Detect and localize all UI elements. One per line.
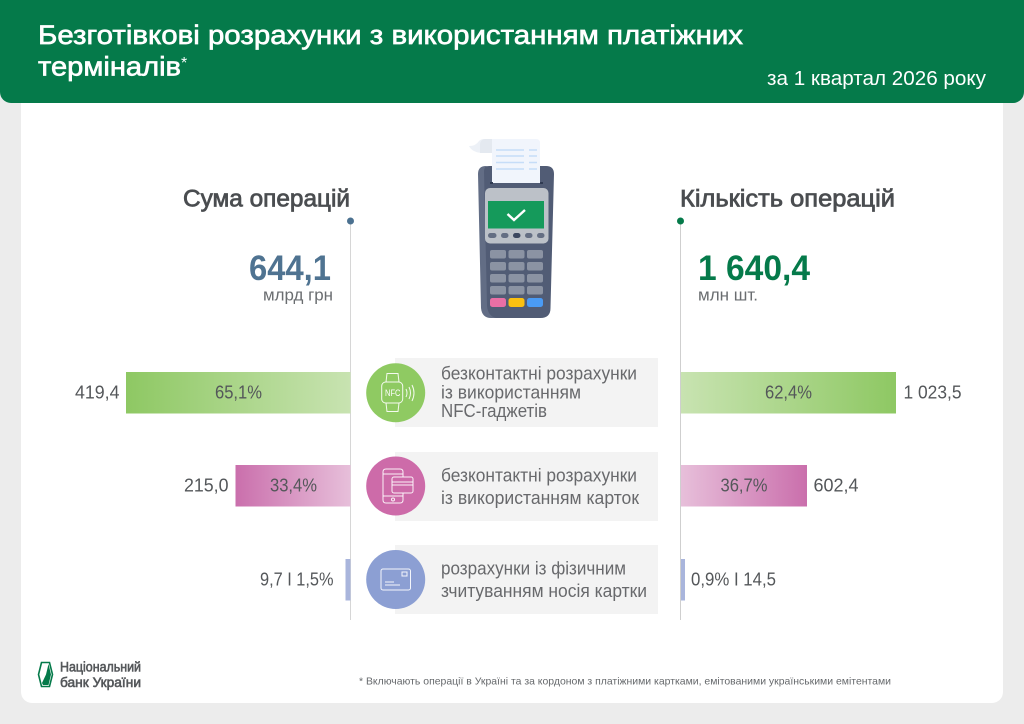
right bar: 1 023,5 <box>904 382 962 402</box>
left bar: 65,1% <box>215 382 262 402</box>
left bar: 9,7 І 1,5% <box>260 570 334 590</box>
left column heading and axis <box>183 186 354 620</box>
description panel: із використанням <box>441 382 581 402</box>
right bar: 602,4 <box>814 476 858 496</box>
right bar: 0,9% І 14,5 <box>691 570 776 590</box>
left column heading and axis: Сума операцій <box>183 186 350 212</box>
logo: National Bank of Ukraine: банк України <box>60 674 141 690</box>
icon: phone and card <box>366 456 425 516</box>
description panel: безконтактні розрахунки <box>441 364 637 384</box>
total amount: млрд грн <box>263 286 333 304</box>
right bar <box>681 372 962 414</box>
title: терміналів <box>38 52 181 82</box>
left bar <box>260 559 350 600</box>
description panel: розрахунки із фізичним <box>441 558 626 578</box>
total count <box>698 249 811 304</box>
description panel <box>395 452 658 521</box>
icon: payment terminal <box>469 139 554 318</box>
right column heading and axis: Кількість операцій <box>680 186 895 212</box>
row 2: cards <box>184 452 858 521</box>
description panel: із використанням карток <box>441 488 639 508</box>
row 3: physical card <box>260 545 776 614</box>
total count: млн шт. <box>698 286 758 304</box>
footnote: * Включають операції в Україні та за кордоном з платіжними картками, емітованими українськими емітентами <box>359 676 891 688</box>
icon: bank card <box>366 550 425 609</box>
left bar: 419,4 <box>75 382 120 402</box>
description panel <box>395 545 658 614</box>
total amount: 644,1 <box>249 249 331 288</box>
total amount <box>249 249 333 304</box>
right bar: 62,4% <box>765 382 812 402</box>
left bar <box>75 372 350 414</box>
left bar: 33,4% <box>270 476 317 496</box>
total count: 1 640,4 <box>698 249 811 288</box>
icon: NFC watch <box>366 363 425 422</box>
row 1: NFC <box>75 358 962 427</box>
right bar <box>681 559 776 600</box>
left bar: 215,0 <box>184 476 228 496</box>
header band <box>0 0 1024 103</box>
description panel: NFC-гаджетів <box>441 401 547 421</box>
logo: National Bank of Ukraine: Національний <box>60 658 141 674</box>
description panel: безконтактні розрахунки <box>441 466 637 486</box>
period label: за 1 квартал 2026 року <box>767 67 987 90</box>
right column heading and axis <box>677 186 895 620</box>
title: Безготівкові розрахунки з використанням платіжних <box>38 20 743 50</box>
right bar <box>681 465 858 506</box>
right bar: 36,7% <box>720 476 768 496</box>
title footnote mark: * <box>181 55 187 72</box>
left bar <box>184 465 350 506</box>
description panel: зчитуванням носія картки <box>441 581 647 601</box>
description panel <box>395 358 658 427</box>
logo: National Bank of Ukraine <box>38 658 141 690</box>
icon: NFC watch: NFC <box>385 388 401 398</box>
